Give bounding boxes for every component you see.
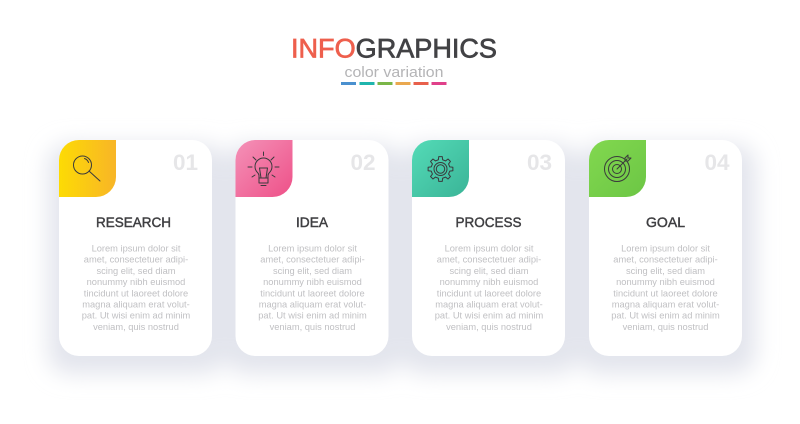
body text: goal: veniam, quis nostrud	[623, 322, 708, 332]
body text: goal: Lorem ipsum dolor sit	[621, 244, 710, 254]
tab: goal	[589, 140, 646, 197]
number 02: 02	[350, 150, 376, 175]
body text: process: amet, consectetuer adipi-	[437, 255, 541, 265]
body text: idea: scing elit, sed diam	[273, 266, 352, 276]
body text: idea: pat. Ut wisi enim ad minim	[258, 311, 367, 321]
number 01: 01	[173, 150, 198, 175]
body text: process: nonummy nibh euismod	[440, 277, 538, 287]
body text: goal: scing elit, sed diam	[626, 266, 705, 276]
icon: gear	[428, 157, 453, 181]
body text: process: veniam, quis nostrud	[446, 322, 532, 332]
number 03: 03	[527, 150, 552, 175]
icon: light bulb	[248, 152, 279, 186]
body text: goal	[611, 244, 720, 332]
panel: process	[412, 140, 565, 356]
body text: research: magna aliquam erat volut-	[82, 300, 190, 310]
body text: idea: veniam, quis nostrud	[270, 322, 355, 332]
panel: goal	[589, 140, 742, 356]
colour legend bars	[341, 82, 446, 85]
heading: goal: GOAL	[646, 214, 685, 230]
icon: target	[604, 155, 631, 182]
body text: process: pat. Ut wisi enim ad minim	[435, 311, 543, 321]
tab: idea	[236, 140, 292, 197]
body text: research: scing elit, sed diam	[96, 266, 176, 276]
body text: research: amet, consectetuer adipi-	[84, 255, 188, 265]
body text: idea: tincidunt ut laoreet dolore	[260, 288, 365, 298]
subtitle: color variation	[344, 65, 444, 81]
body text: research: nonummy nibh euismod	[87, 277, 185, 287]
tab: process	[412, 140, 469, 197]
body text: goal: amet, consectetuer adipi-	[613, 255, 718, 265]
body text: process: scing elit, sed diam	[449, 266, 529, 276]
body text: idea: amet, consectetuer adipi-	[260, 255, 365, 265]
icon: magnifying glass	[74, 156, 100, 181]
body text: goal: nonummy nibh euismod	[616, 277, 715, 287]
heading: idea: IDEA	[296, 214, 329, 230]
number 04: 04	[704, 150, 730, 175]
body text: idea: nonummy nibh euismod	[263, 277, 362, 287]
body text: research: tincidunt ut laoreet dolore	[84, 288, 188, 298]
body text: goal: magna aliquam erat volut-	[612, 300, 719, 310]
body text: research	[82, 244, 190, 332]
heading: process: PROCESS	[456, 214, 522, 230]
body text: research: pat. Ut wisi enim ad minim	[82, 311, 190, 321]
panel: research	[59, 140, 212, 356]
body text: goal: tincidunt ut laoreet dolore	[613, 288, 718, 298]
body text: process: Lorem ipsum dolor sit	[445, 244, 534, 254]
body text: idea: magna aliquam erat volut-	[259, 300, 366, 310]
body text: idea: Lorem ipsum dolor sit	[268, 244, 357, 254]
card shadows	[48, 144, 756, 374]
body text: research: veniam, quis nostrud	[93, 322, 179, 332]
body text: process: tincidunt ut laoreet dolore	[437, 288, 541, 298]
heading: research: RESEARCH	[96, 214, 171, 230]
tab: research	[59, 140, 116, 197]
body text: research: Lorem ipsum dolor sit	[92, 244, 181, 254]
body text: process: magna aliquam erat volut-	[435, 300, 543, 310]
body text: idea	[258, 244, 367, 332]
body text: goal: pat. Ut wisi enim ad minim	[611, 311, 720, 321]
title: INFOGRAPHICS	[291, 34, 497, 64]
body text: process	[435, 244, 543, 332]
panel: idea	[236, 140, 388, 356]
